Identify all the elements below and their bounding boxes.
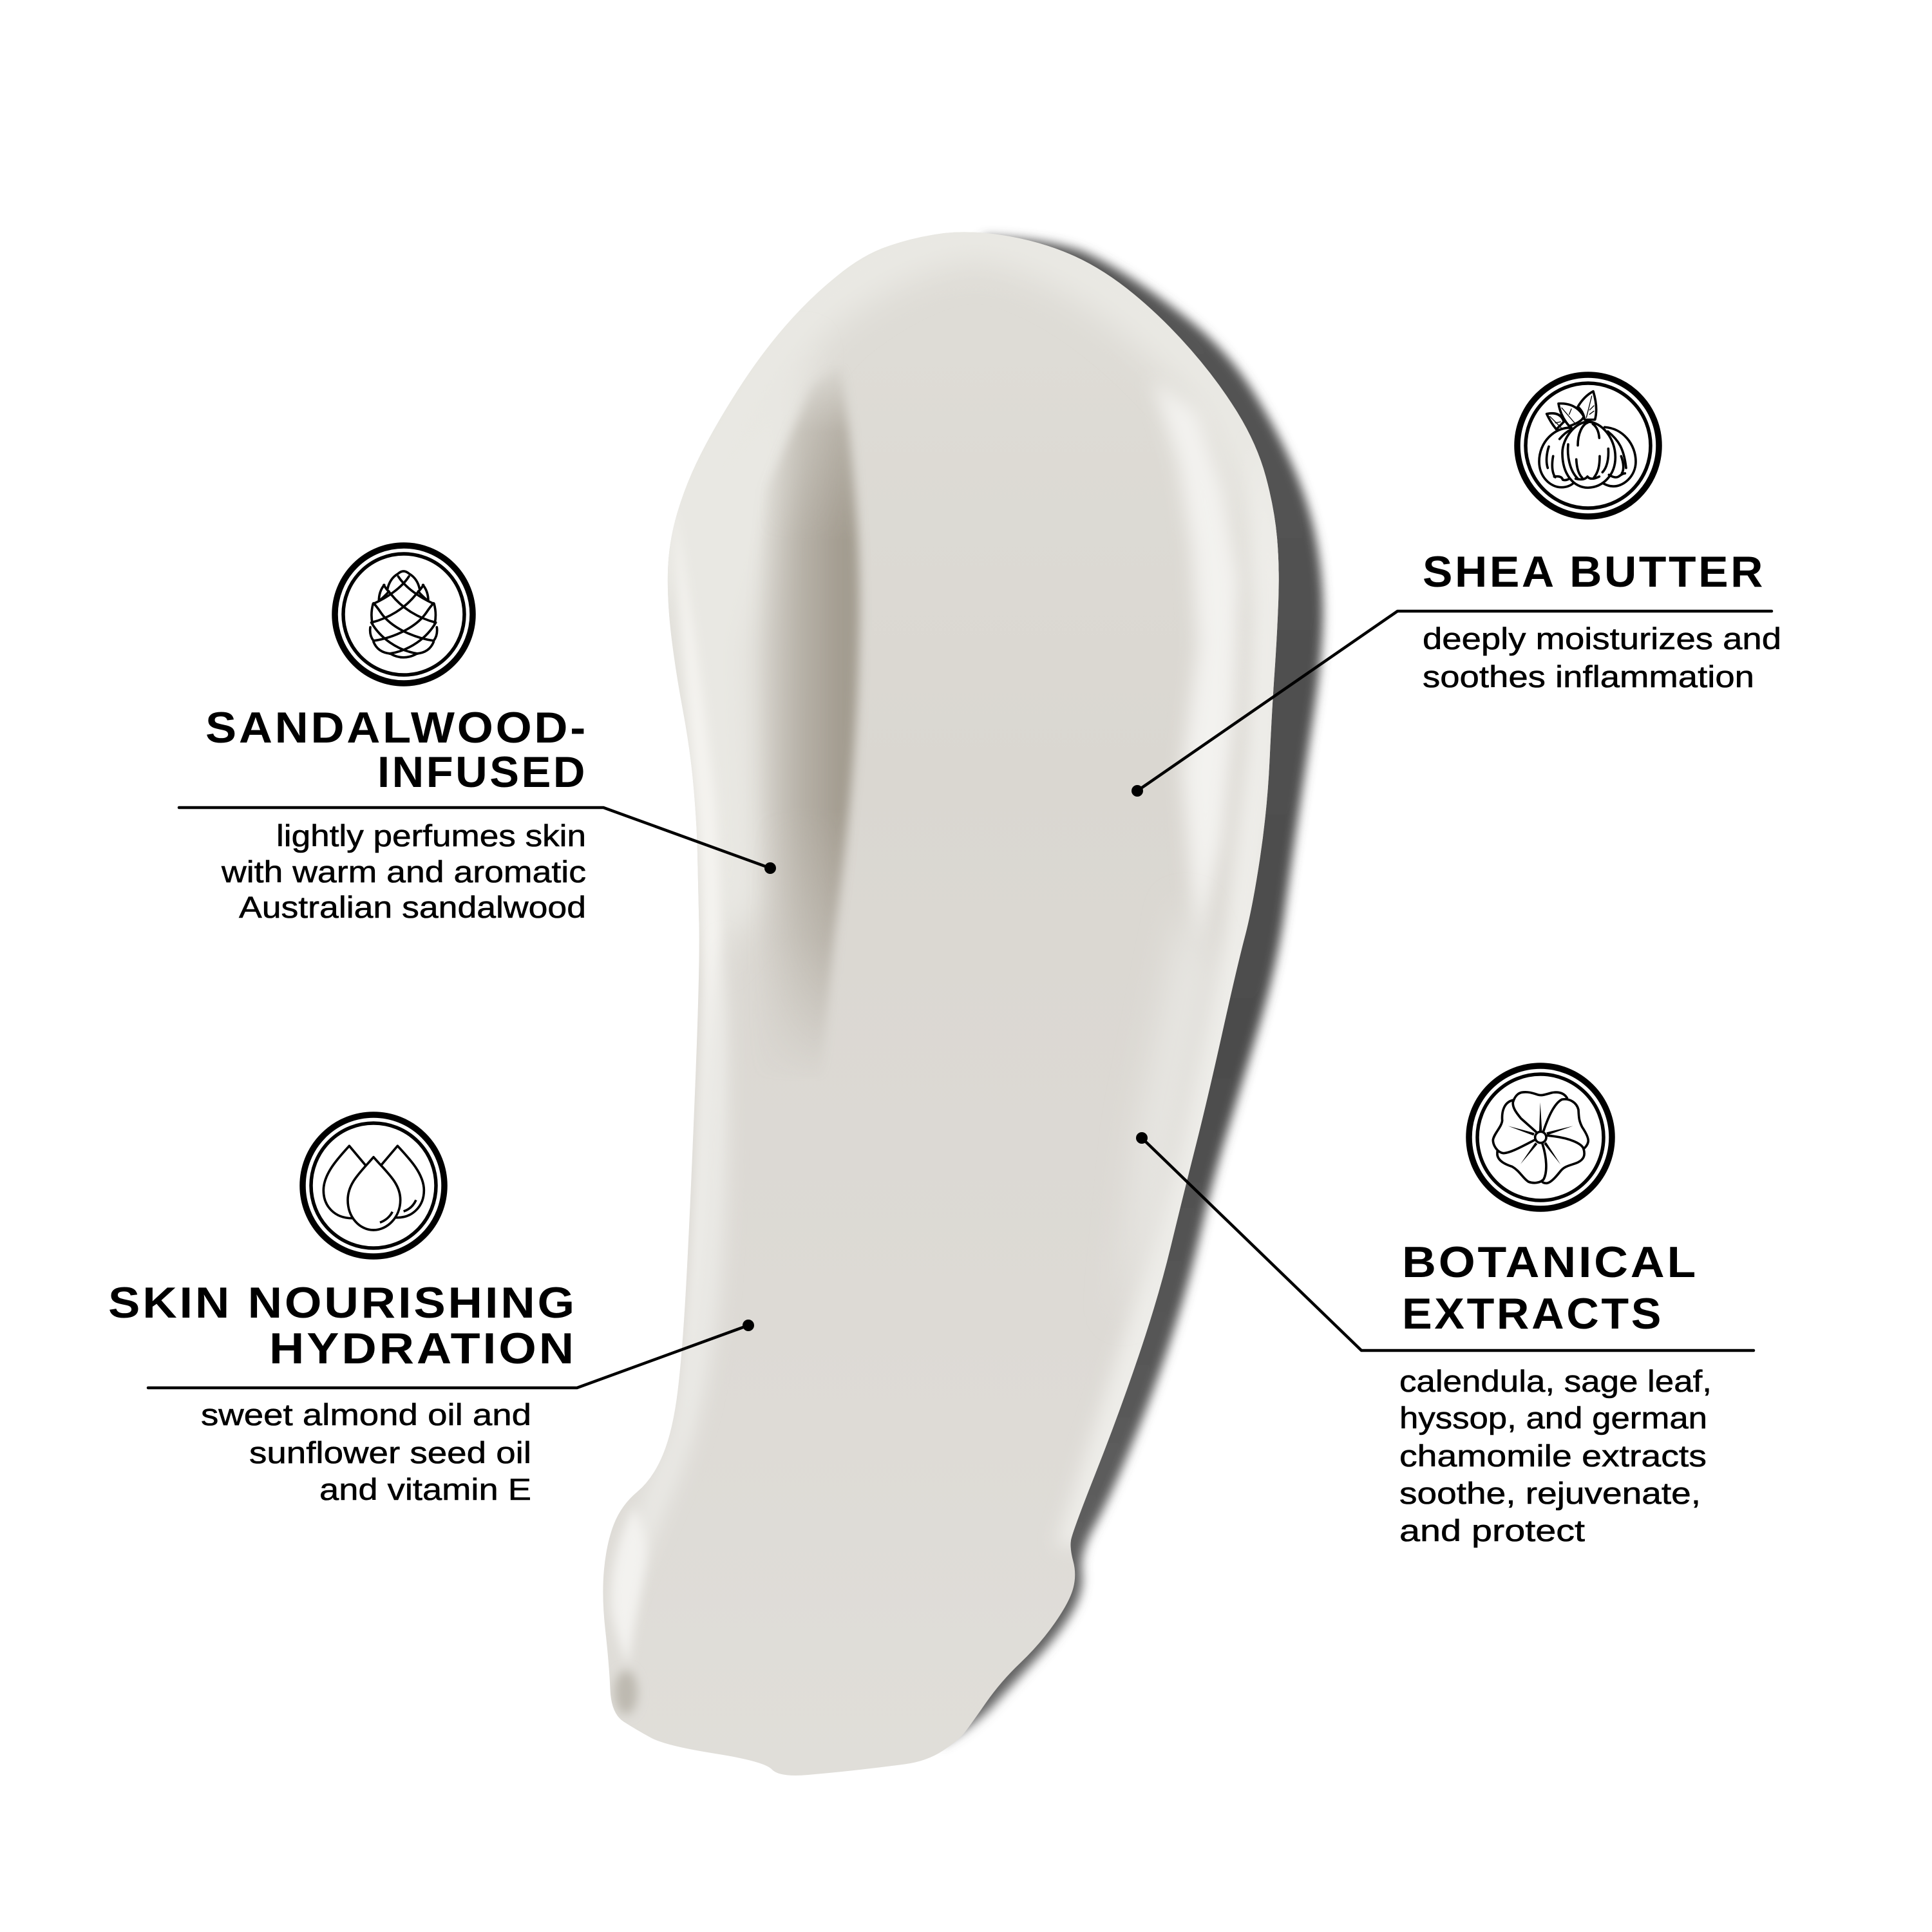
- callout: shea butter: [1132, 375, 1781, 797]
- heading: sandalwood-infused: SANDALWOOD-: [205, 703, 588, 752]
- heading: sandalwood-infused: [205, 703, 588, 797]
- description: sandalwood-infused: [221, 819, 586, 924]
- description: shea butter: soothes inflammation: [1423, 659, 1754, 694]
- description: skin nourishing hydration: [201, 1397, 531, 1506]
- description: sandalwood-infused: Australian sandalwood: [239, 890, 586, 924]
- description: botanical extracts: and protect: [1399, 1513, 1585, 1548]
- description: shea butter: [1423, 621, 1781, 694]
- description: sandalwood-infused: lightly perfumes skin: [276, 819, 586, 853]
- description: shea butter: deeply moisturizes and: [1423, 621, 1781, 656]
- description: botanical extracts: soothe, rejuvenate,: [1399, 1476, 1701, 1510]
- icon: flower: [1469, 1066, 1612, 1209]
- heading: skin nourishing hydration: [108, 1278, 577, 1373]
- description: botanical extracts: chamomile extracts: [1399, 1439, 1707, 1473]
- heading: botanical extracts: EXTRACTS: [1402, 1289, 1663, 1338]
- heading: botanical extracts: [1402, 1238, 1698, 1338]
- callout: skin nourishing hydration: [108, 1115, 754, 1506]
- icon: water drops: [303, 1115, 444, 1256]
- heading: sandalwood-infused: INFUSED: [377, 748, 587, 797]
- infographic canvas: [109, 229, 1779, 1776]
- leader line: shea butter: [1132, 611, 1772, 797]
- description: botanical extracts: calendula, sage leaf,: [1399, 1364, 1712, 1398]
- icon: shea nuts: [1517, 375, 1659, 516]
- leader line: botanical extracts: [1136, 1132, 1754, 1350]
- heading: skin nourishing hydration: HYDRATION: [269, 1324, 576, 1373]
- description: sandalwood-infused: with warm and aromatic: [221, 855, 586, 889]
- callout: sandalwood-infused: [179, 545, 776, 924]
- leader line: skin nourishing hydration: [148, 1320, 754, 1388]
- heading: skin nourishing hydration: SKIN NOURISHING: [108, 1278, 577, 1327]
- description: skin nourishing hydration: sweet almond oil and: [201, 1397, 531, 1432]
- leader line: sandalwood-infused: [179, 808, 776, 874]
- heading: botanical extracts: BOTANICAL: [1402, 1238, 1698, 1287]
- description: botanical extracts: hyssop, and german: [1399, 1401, 1707, 1435]
- cream swatch: [580, 219, 1323, 1790]
- description: skin nourishing hydration: and vitamin E: [319, 1472, 531, 1506]
- callout: botanical extracts: [1136, 1066, 1754, 1548]
- description: skin nourishing hydration: sunflower seed oil: [249, 1435, 531, 1470]
- description: botanical extracts: [1399, 1364, 1712, 1548]
- icon: pine cone: [335, 545, 473, 683]
- heading: shea butter: SHEA BUTTER: [1423, 547, 1765, 596]
